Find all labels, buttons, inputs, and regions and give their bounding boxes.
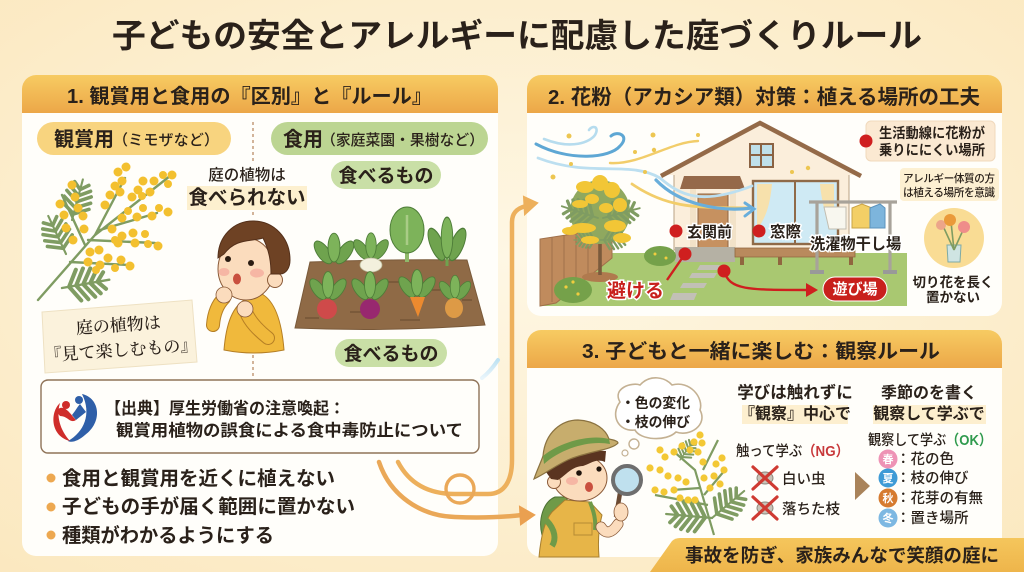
bullet list: [46, 468, 355, 547]
panel: 1 ornamental vs edible: [22, 75, 498, 556]
callout: allergy note: アレルギー体質の方: [903, 172, 995, 185]
source box: 観賞用植物の誤食による食中毒防止について: [116, 420, 463, 440]
note card: 庭の植物は: [75, 313, 161, 338]
illustration: thinking child: [213, 221, 290, 353]
thought bubble: ・色の変化: [621, 395, 690, 411]
source box: [41, 380, 479, 453]
pill: ornamental: [37, 122, 231, 155]
source box: 【出典】厚生労働省の注意喚起：: [105, 399, 345, 418]
panel 2 header: [527, 75, 1002, 113]
marker: window: [752, 223, 802, 241]
illustration: mimosa stem: [646, 431, 753, 535]
bullet list: 子どもの手が届く範囲に置かない: [62, 495, 355, 518]
callout: low traffic area: [860, 121, 995, 161]
marker: entrance: 玄関前: [687, 223, 732, 241]
callout: low traffic area: 乗りににくい場所: [879, 142, 985, 158]
text: do not leave cut flowers: 切り花を長く: [912, 275, 994, 290]
text: garden plants cannot be eaten: 食べられない: [188, 187, 306, 209]
list: OK seasons: 夏: [882, 472, 894, 485]
text: garden plants cannot be eaten: 庭の植物は: [208, 166, 286, 184]
pill: edible: （家庭菜園・果樹など）: [321, 132, 484, 149]
list: NG: 白い虫: [782, 471, 826, 488]
callout: low traffic area: 生活動線に花粉が: [879, 125, 985, 141]
icon: ministry logo: [53, 394, 97, 442]
pill: things to eat bottom: [335, 339, 447, 367]
list: OK seasons: ：花の色: [896, 450, 954, 468]
footer banner: [650, 538, 1024, 572]
illustration: explorer child: [534, 420, 641, 557]
heading: learn without touching: 学びは触れずに: [737, 382, 853, 402]
arrow: to play area: 遊び場: [832, 280, 878, 298]
list: OK seasons: 春: [882, 452, 894, 466]
note card: 『見て楽しむもの』: [44, 336, 198, 365]
marker: avoid: 避ける: [607, 280, 664, 302]
marker: avoid: [607, 248, 692, 302]
label: laundry area: 洗濯物干し場: [810, 235, 901, 253]
heading: learn without touching: 『観察』中心で: [739, 404, 851, 423]
text: garden plants cannot be eaten: [187, 166, 307, 210]
list: OK seasons: 観察して学ぶ（OK）: [868, 432, 992, 449]
thought bubble: ・枝の伸び: [621, 414, 690, 430]
title: 子どもの安全とアレルギーに配慮した庭づくりルール: [112, 17, 922, 54]
pill: things to eat top: 食べるもの: [338, 165, 434, 187]
marker: window: 窓際: [770, 223, 802, 241]
illustration: mimosa branch: [36, 162, 176, 303]
heading: seasons: [873, 383, 986, 424]
heading: seasons: 観察して学ぶで: [873, 404, 985, 423]
callout: allergy note: [900, 168, 999, 201]
illustration: shrubs: [554, 246, 676, 303]
text: do not leave cut flowers: [912, 275, 994, 305]
bullet list: 種類がわかるようにする: [62, 524, 274, 547]
pill: edible: 食用: [283, 128, 323, 151]
pill: things to eat top: [331, 161, 441, 189]
note card: [42, 300, 198, 373]
footer banner: 事故を防ぎ、家族みんなで笑顔の庭に: [685, 545, 999, 566]
list: NG: 触って学ぶ（NG）: [736, 443, 849, 460]
pill: ornamental: （ミモザなど）: [113, 132, 219, 149]
pill: things to eat bottom: 食べるもの: [343, 343, 439, 365]
illustration: wind and pollen: [536, 127, 810, 216]
list: OK seasons: 冬: [882, 511, 894, 525]
pill: edible: [271, 122, 488, 155]
list: NG: 落ちた枝: [782, 501, 840, 518]
arrows: connecting ribbon: [379, 197, 537, 524]
bullet list: 食用と観賞用を近くに植えない: [62, 468, 335, 490]
illustration: laundry pole: [809, 202, 897, 272]
panel 2 header: 2. 花粉（アカシア類）対策：植える場所の工夫: [548, 86, 980, 109]
list: OK seasons: [868, 432, 992, 528]
panel 3 header: 3. 子どもと一緒に楽しむ：観察ルール: [582, 340, 940, 363]
thought bubble: [616, 378, 702, 456]
panel 3 header: [527, 330, 1002, 368]
panel: 2 pollen: [527, 75, 1002, 316]
list: NG: [736, 443, 849, 519]
illustration: vegetable garden: [295, 207, 485, 329]
arrow: NG to OK: [855, 472, 870, 500]
pill: ornamental: 観賞用: [54, 128, 114, 151]
list: OK seasons: 秋: [882, 491, 894, 505]
icon: cut flowers: [924, 208, 984, 268]
panel 1 header: 1. 観賞用と食用の『区別』と『ルール』: [67, 85, 432, 108]
callout: allergy note: は植える場所を意識: [903, 186, 995, 199]
illustration: mimosa tree: [558, 175, 643, 282]
illustration: house: [661, 123, 861, 300]
text: do not leave cut flowers: 置かない: [926, 290, 980, 305]
heading: seasons: 季節のを書く: [881, 383, 977, 402]
heading: learn without touching: [737, 382, 853, 424]
panel: 3 observation: [527, 330, 1002, 557]
list: OK seasons: ：花芽の有無: [896, 490, 983, 507]
arrow: to play area: [718, 264, 887, 301]
marker: entrance: [670, 223, 732, 241]
list: OK seasons: ：置き場所: [896, 510, 969, 527]
panel 1 header: [22, 75, 498, 113]
illustration: garden ground and fence: [540, 228, 907, 306]
list: OK seasons: ：枝の伸び: [896, 470, 969, 487]
